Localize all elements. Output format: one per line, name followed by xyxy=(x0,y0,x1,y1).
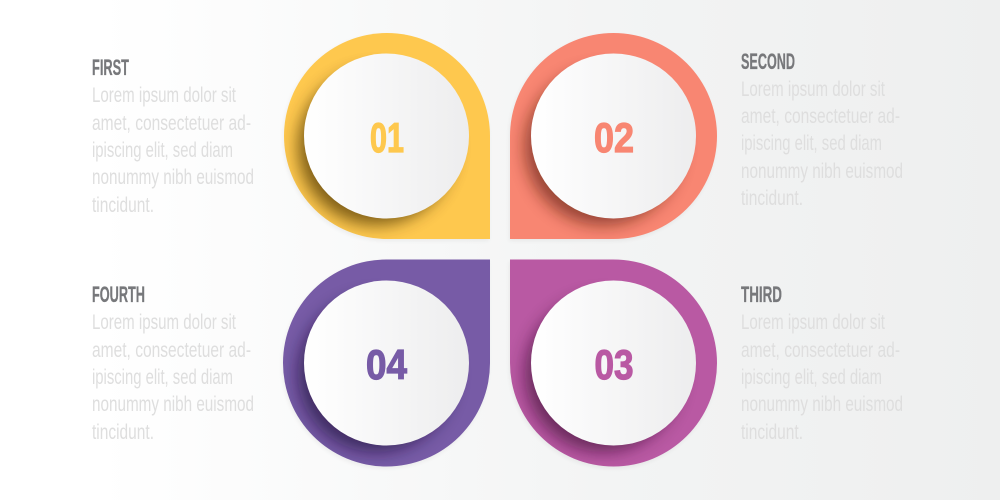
body: fourth: nonummy nibh euismod xyxy=(92,393,254,416)
body: third: tincidunt. xyxy=(741,421,803,444)
body: third: amet, consectetuer ad- xyxy=(741,339,900,362)
body: first: amet, consectetuer ad- xyxy=(92,112,251,135)
body: second: tincidunt. xyxy=(741,187,803,210)
body: fourth: ipiscing elit, sed diam xyxy=(92,366,233,389)
body: second: amet, consectetuer ad- xyxy=(741,105,900,128)
petal 04: purple xyxy=(282,259,490,468)
body: first xyxy=(92,84,254,217)
body: first: tincidunt. xyxy=(92,194,154,217)
body: second xyxy=(741,78,903,210)
body: second: nonummy nibh euismod xyxy=(741,160,903,183)
petal 02: coral xyxy=(509,33,717,241)
text block: first xyxy=(92,55,254,217)
body: second: Lorem ipsum dolor sit xyxy=(741,78,885,101)
text block: second xyxy=(741,49,903,210)
body: third: ipiscing elit, sed diam xyxy=(741,366,882,389)
body: first: nonummy nibh euismod xyxy=(92,166,254,189)
heading: fourth: FOURTH xyxy=(92,282,145,307)
number 01: 01 xyxy=(370,114,404,161)
body: third: nonummy nibh euismod xyxy=(741,393,903,416)
petal 03: magenta xyxy=(509,260,717,468)
text block: fourth xyxy=(92,282,254,444)
number 04: 04 xyxy=(366,341,408,388)
heading: third: THIRD xyxy=(741,282,782,307)
body: fourth: tincidunt. xyxy=(92,421,154,444)
body: third: Lorem ipsum dolor sit xyxy=(741,311,885,334)
number 03: 03 xyxy=(594,341,634,388)
heading: first: FIRST xyxy=(92,55,129,80)
number 02: 02 xyxy=(594,114,634,161)
body: second: ipiscing elit, sed diam xyxy=(741,132,882,155)
body: first: ipiscing elit, sed diam xyxy=(92,139,233,162)
body: fourth: Lorem ipsum dolor sit xyxy=(92,311,236,334)
body: third xyxy=(741,311,903,444)
body: first: Lorem ipsum dolor sit xyxy=(92,84,236,107)
petal 01: yellow xyxy=(283,33,490,241)
body: fourth: amet, consectetuer ad- xyxy=(92,339,251,362)
heading: second: SECOND xyxy=(741,49,795,74)
body: fourth xyxy=(92,311,254,444)
text block: third xyxy=(741,282,903,444)
